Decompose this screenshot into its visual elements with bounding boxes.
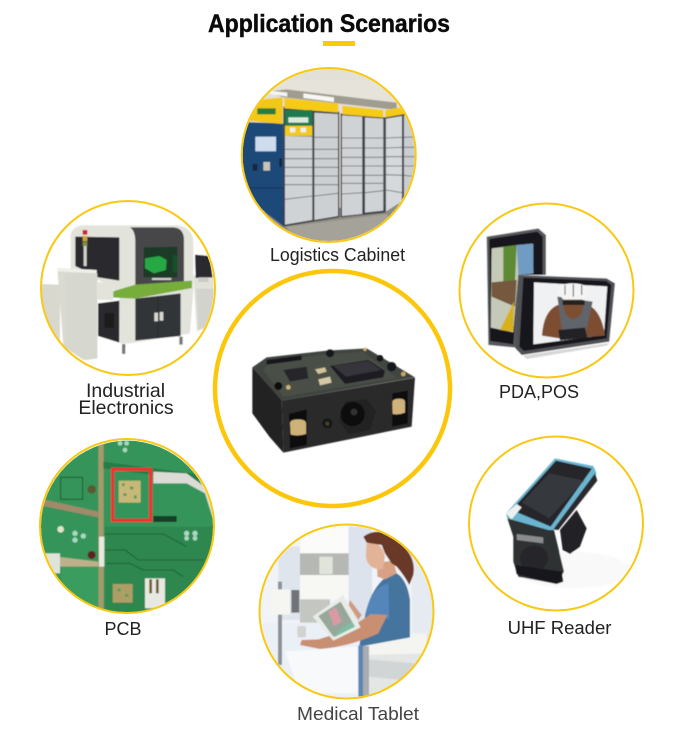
title: Application Scenarios (208, 10, 450, 38)
label: PCB (104, 619, 142, 639)
ring (460, 204, 634, 378)
central product: scan engine module (215, 271, 450, 506)
label: UHF Reader (508, 617, 611, 638)
label: Medical Tablet (297, 704, 419, 724)
ring (242, 68, 416, 242)
photo: circuit board (37, 437, 217, 617)
locker columns (283, 107, 339, 227)
photo: module (252, 348, 415, 453)
scenario: industrial electronics (40, 200, 217, 419)
ring (215, 271, 450, 506)
scenario: PCB (37, 437, 217, 639)
scenario: PDA, POS (457, 202, 637, 402)
ring (260, 524, 434, 698)
photo: inspection machine (42, 225, 214, 360)
nurse (359, 572, 410, 646)
cabinet (57, 268, 97, 360)
photo: parcel lockers (240, 67, 420, 247)
scenario: logistics cabinet (240, 67, 420, 265)
ring (469, 436, 643, 610)
photo: handheld reader (506, 458, 630, 588)
label: Electronics (78, 397, 174, 419)
scenario: medical tablet (257, 523, 437, 724)
ring (41, 201, 215, 375)
label: Logistics Cabinet (270, 245, 405, 265)
tablet (313, 595, 361, 641)
scenario: UHF reader (469, 436, 643, 638)
photo: nurse with tablet (257, 523, 437, 700)
photo: rugged tablets (486, 228, 616, 360)
label: Industrial (86, 380, 165, 402)
label: PDA,POS (499, 382, 579, 402)
blue kiosk (240, 122, 284, 227)
ring (40, 439, 214, 613)
body (71, 225, 193, 343)
